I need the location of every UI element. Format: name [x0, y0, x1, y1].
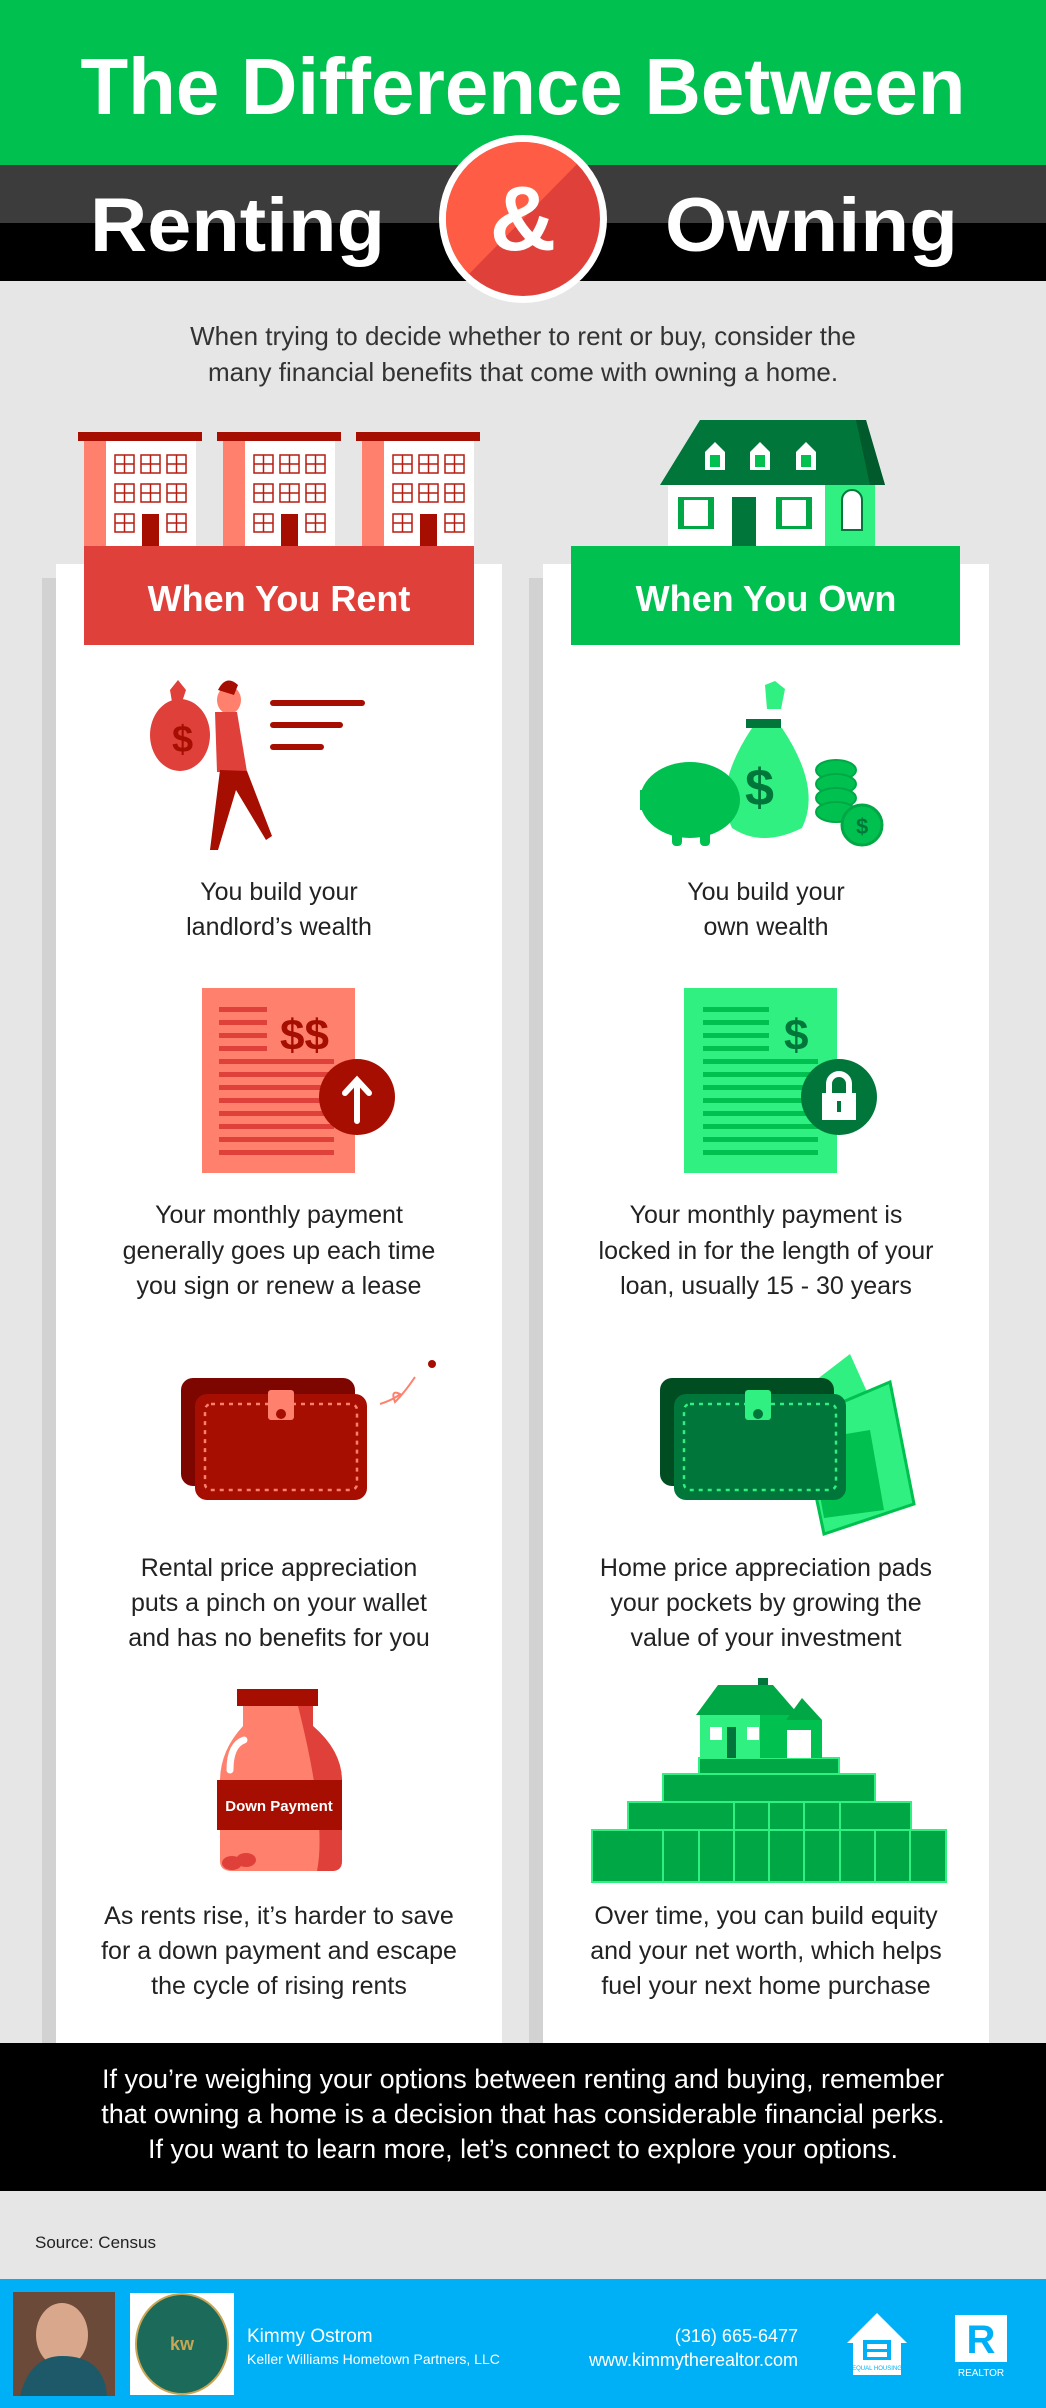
icon: piggy bank and money bag [640, 681, 882, 846]
panel shadows [42, 578, 543, 2043]
subtitle right: Owning [665, 183, 958, 268]
contact: www.kimmytherealtor.com [588, 2350, 798, 2370]
icon: down payment jar [217, 1689, 342, 1871]
icon: house [660, 420, 885, 546]
text: equity [590, 1902, 942, 2000]
agent name: Keller Williams Hometown Partners, LLC [247, 2351, 500, 2367]
text: equity: fuel your next home purchase [601, 1972, 931, 2000]
header: green band [0, 0, 1046, 165]
text: landlord wealth [186, 878, 372, 941]
text: equity: and your net worth, which helps [590, 1937, 942, 1965]
icon: down payment jar: Down Payment [225, 1798, 333, 1815]
logo: kw [170, 2334, 195, 2354]
icon: piggy bank and money bag: $ [856, 814, 868, 839]
icon: green wallet with cash [660, 1354, 914, 1534]
icon: house on money pyramid [592, 1678, 946, 1882]
icon: realtor: REALTOR [958, 2368, 1004, 2379]
intro text: When trying to decide whether to rent or buy, consider the [190, 321, 856, 351]
text: own wealth [687, 878, 845, 941]
text: locked payment [599, 1201, 933, 1300]
icon: apartment buildings [78, 432, 480, 546]
text: landlord wealth: You build your [200, 878, 358, 906]
header: dark band [0, 165, 1046, 281]
text: home appreciation: value of your investment [631, 1624, 902, 1652]
icon: realtor: R [967, 2318, 996, 2362]
text: down payment: the cycle of rising rents [151, 1972, 407, 2000]
closing callout band: If you’re weighing your options between renting and buying, remember [102, 2064, 944, 2094]
agent name: Kimmy Ostrom [247, 2326, 373, 2347]
heading: when you own [571, 546, 960, 645]
text: rental appreciation [128, 1554, 430, 1652]
icon: mortgage bill with lock [684, 988, 877, 1173]
text: down payment: As rents rise, it’s harder to save [104, 1902, 454, 1930]
intro text: many financial benefits that come with owning a home. [208, 357, 838, 387]
text: rent payment: you sign or renew a lease [137, 1272, 421, 1300]
icon: piggy bank and money bag: $ [745, 759, 774, 817]
text: locked payment: locked in for the length of your [599, 1237, 933, 1265]
heading: when you rent [84, 546, 474, 645]
footer [0, 2279, 1046, 2408]
text: own wealth: You build your [687, 878, 845, 906]
icon: rent bill with up arrow: $$ [280, 1011, 329, 1060]
icon: equal housing: EQUAL HOUSING [852, 2366, 902, 2372]
agent name [247, 2326, 500, 2367]
ampersand badge: & [490, 168, 556, 270]
text: own wealth: own wealth [703, 913, 829, 941]
text: landlord wealth: landlord’s wealth [186, 913, 372, 941]
icon: mortgage bill with lock: $ [784, 1011, 808, 1060]
icon: equal housing [847, 2313, 907, 2375]
text: equity: Over time, you can build equity [594, 1902, 938, 1930]
agent photo [13, 2292, 115, 2396]
text: rent payment [123, 1201, 435, 1300]
panel: rent [56, 564, 502, 2043]
closing callout band: If you want to learn more, let’s connect to explore your options. [148, 2134, 898, 2164]
heading: when you own: When You Own [636, 578, 896, 619]
contact: (316) 665-6477 [675, 2326, 798, 2346]
text: rent payment: generally goes up each time [123, 1237, 435, 1265]
logo [130, 2293, 234, 2395]
text: rental appreciation: Rental price appreciation [141, 1554, 417, 1582]
icon: empty red wallet [181, 1360, 436, 1500]
icon: realtor [955, 2315, 1007, 2379]
source: Source: Census [35, 2233, 156, 2252]
text: rental appreciation: puts a pinch on your wallet [131, 1589, 427, 1617]
text: locked payment: loan, usually 15 - 30 years [620, 1272, 912, 1300]
text: down payment: for a down payment and escape [101, 1937, 457, 1965]
title: The Difference Between [80, 42, 966, 131]
text: home appreciation [600, 1554, 932, 1652]
text: locked payment: Your monthly payment is [630, 1201, 902, 1229]
panel: own [543, 564, 989, 2043]
text: down payment [101, 1902, 457, 2000]
text: home appreciation: your pockets by growing the [610, 1589, 922, 1617]
icon: man carrying money bag [150, 680, 365, 850]
icon: rent bill with up arrow [202, 988, 395, 1173]
text: rent payment: Your monthly payment [155, 1201, 403, 1229]
text: rental appreciation: and has no benefits for you [128, 1624, 430, 1652]
heading: when you rent: When You Rent [148, 578, 410, 619]
closing callout band: that owning a home is a decision that has considerable financial perks. [101, 2099, 945, 2129]
contact [588, 2326, 798, 2370]
intro text [190, 321, 856, 387]
subtitle left: Renting [90, 183, 385, 268]
closing callout band [0, 2043, 1046, 2191]
text: home appreciation: Home price appreciation pads [600, 1554, 932, 1582]
icon: man carrying money bag: $ [172, 719, 193, 761]
ampersand badge [439, 135, 607, 303]
